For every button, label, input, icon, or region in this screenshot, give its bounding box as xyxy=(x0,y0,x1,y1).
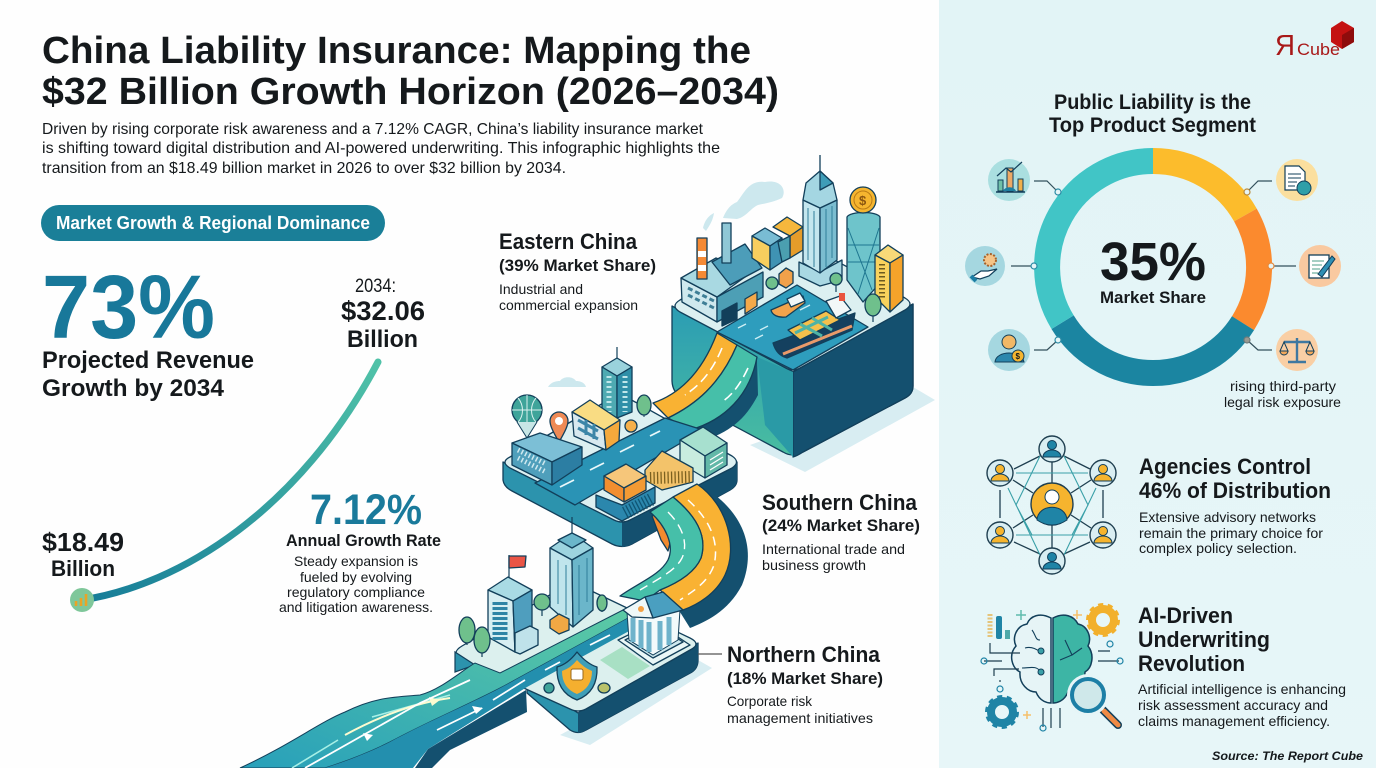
stat: annual growth rate xyxy=(279,486,441,615)
isometric illustration: regional pathway xyxy=(240,155,935,768)
label: southern china: business growth xyxy=(762,557,866,573)
donut chart xyxy=(1047,161,1259,373)
donut caption: legal risk exposure xyxy=(1224,394,1341,410)
icon: hand holding gear xyxy=(965,246,1005,286)
icon: document with check xyxy=(1276,159,1318,201)
text: ai-driven underwriting: Artificial intelligence is enhancing xyxy=(1138,681,1346,697)
text: ai-driven underwriting: risk assessment accuracy and xyxy=(1138,697,1328,713)
road from eastern to central xyxy=(653,333,758,442)
boats xyxy=(771,293,855,358)
label: 2026 value: Billion xyxy=(51,556,115,581)
icon: scales xyxy=(1276,329,1318,371)
containers east xyxy=(752,217,803,288)
title: $32 Billion Growth Horizon (2026–2034) xyxy=(42,71,779,113)
northern: shield xyxy=(544,652,610,700)
logo: Cube xyxy=(1297,40,1340,59)
stat: 73 percent projected growth xyxy=(42,258,254,402)
label: southern china: International trade and xyxy=(762,541,905,557)
label: eastern china: commercial expansion xyxy=(499,297,638,313)
round tower with coin: $ xyxy=(859,193,867,208)
label: southern china: Southern China xyxy=(762,490,918,515)
text: agencies control: remain the primary choice for xyxy=(1139,525,1323,541)
heading: public liability xyxy=(1049,91,1256,137)
text: ai-driven underwriting: claims management efficiency. xyxy=(1138,713,1330,729)
panel: right sidebar background xyxy=(939,0,1376,768)
label: northern china: Northern China xyxy=(727,642,881,667)
label: 2034 value: $32.06 xyxy=(341,296,425,326)
title xyxy=(42,30,779,113)
label: northern china: management initiatives xyxy=(727,710,873,726)
label: northern china: Corporate risk xyxy=(727,693,813,709)
section pill: market growth: Market Growth & Regional Dominance xyxy=(56,213,370,233)
text: ai-driven underwriting: Revolution xyxy=(1138,651,1245,676)
text: agencies control: Extensive advisory networks xyxy=(1139,509,1316,525)
northern: bank building xyxy=(618,592,690,665)
icon: form with pen xyxy=(1299,245,1341,287)
northern china platform xyxy=(455,584,712,745)
text: ai-driven underwriting xyxy=(1138,603,1346,729)
label: southern china: (24% Market Share) xyxy=(762,516,920,535)
section pill: market growth xyxy=(41,205,385,241)
growth curve xyxy=(70,362,378,612)
text: ai-driven underwriting: Underwriting xyxy=(1138,627,1270,652)
east trees xyxy=(766,273,881,322)
label: eastern china: (39% Market Share) xyxy=(499,256,656,275)
label: 2034 value: Billion xyxy=(347,326,418,353)
logo: Я xyxy=(1275,30,1295,62)
donut centre value: 35% xyxy=(1100,232,1206,292)
central china platform xyxy=(503,396,737,547)
stat: annual growth rate: fueled by evolving xyxy=(300,569,412,585)
text: agencies control: 46% of Distribution xyxy=(1139,478,1331,503)
icon: person with coin xyxy=(988,329,1030,371)
northern: trees xyxy=(459,594,607,657)
intro text block: is shifting toward digital distribution and AI-powered underwriting. This infographic highlights the xyxy=(42,140,720,157)
heading: public liability: Public Liability is the xyxy=(1054,91,1251,114)
label: eastern china: Industrial and xyxy=(499,281,583,297)
label: northern china xyxy=(698,642,883,726)
central: cloud, tower and landmarks xyxy=(512,347,651,450)
title: China Liability Insurance: Mapping the xyxy=(42,30,751,72)
text: agencies control xyxy=(1139,454,1331,556)
road from central to northern xyxy=(620,484,748,628)
donut connectors xyxy=(1011,181,1296,350)
skyscraper xyxy=(799,155,842,286)
donut caption: rising third-party xyxy=(1230,378,1336,394)
label: 2034 value: 2034: xyxy=(355,276,396,297)
eastern china platform xyxy=(672,240,935,472)
icon: person with coin: $ xyxy=(1016,352,1020,361)
stat: annual growth rate: and litigation awareness. xyxy=(279,599,433,615)
round tower with coin xyxy=(847,187,880,302)
stat: 73 percent projected growth: Growth by 2034 xyxy=(42,375,225,402)
text: ai-driven underwriting: AI-Driven xyxy=(1138,603,1233,628)
stat: 73 percent projected growth: Projected Revenue xyxy=(42,347,254,374)
intro text block: Driven by rising corporate risk awareness and a 7.12% CAGR, China’s liability insurance market xyxy=(42,121,704,138)
stat: annual growth rate: Steady expansion is xyxy=(294,553,418,569)
intro text block xyxy=(42,121,720,177)
label: northern china: (18% Market Share) xyxy=(727,669,883,688)
central: warehouses and containers xyxy=(512,427,727,521)
stat: annual growth rate: 7.12% xyxy=(310,486,422,534)
icon: ai brain xyxy=(981,605,1123,731)
label: eastern china: Eastern China xyxy=(499,229,638,254)
stat: 73 percent projected growth: 73% xyxy=(42,258,215,358)
donut caption xyxy=(1224,378,1341,410)
label: eastern china xyxy=(499,229,656,313)
intro text block: transition from an $18.49 billion market in 2026 to over $32 billion by 2034. xyxy=(42,160,566,177)
icon: growth chart xyxy=(988,159,1030,201)
donut centre value: Market Share xyxy=(1100,288,1206,307)
label: 2034 value xyxy=(341,276,425,353)
smoke clouds xyxy=(703,181,784,231)
northern: office buildings xyxy=(488,517,593,654)
yellow office xyxy=(875,245,903,312)
text: agencies control: Agencies Control xyxy=(1139,454,1311,479)
source note: Source: The Report Cube xyxy=(1212,749,1363,763)
heading: public liability: Top Product Segment xyxy=(1049,114,1256,137)
icon: agency network xyxy=(987,436,1116,574)
factory xyxy=(681,223,763,326)
stat: annual growth rate: regulatory compliance xyxy=(287,584,425,600)
label: 2026 value xyxy=(42,527,124,581)
main road xyxy=(240,610,640,768)
text: agencies control: complex policy selection. xyxy=(1139,540,1297,556)
label: 2026 value: $18.49 xyxy=(42,527,124,557)
logo xyxy=(1275,21,1354,62)
label: southern china xyxy=(762,490,920,573)
stat: annual growth rate: Annual Growth Rate xyxy=(286,531,441,550)
